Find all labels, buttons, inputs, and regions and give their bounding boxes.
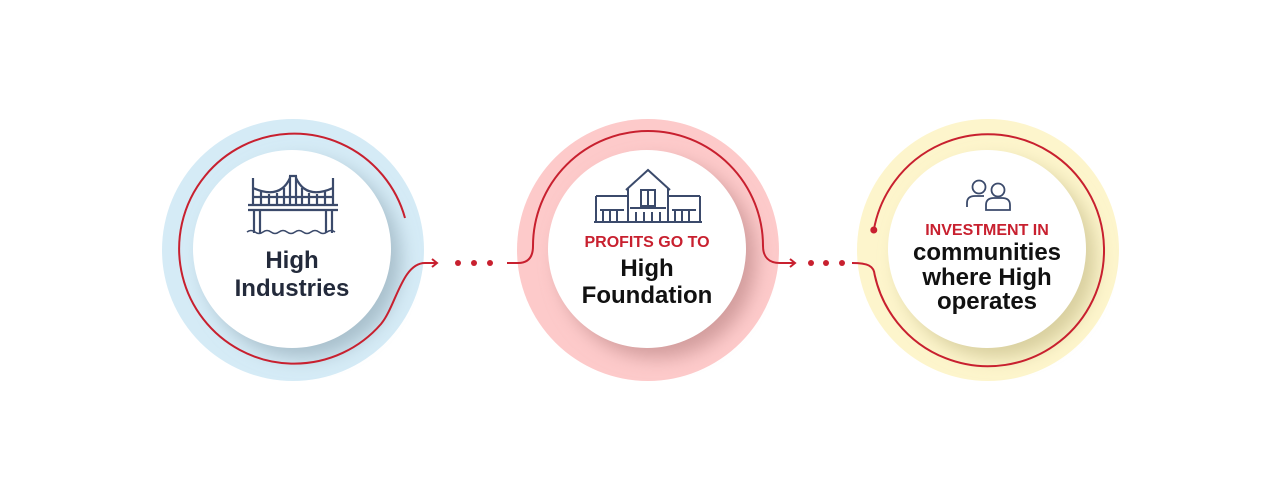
heading: High Industries: High <box>265 247 319 274</box>
panel: High Foundation: High <box>620 255 674 282</box>
panel: High Industries <box>162 119 424 381</box>
panel: Investment in communities: where High <box>921 264 1052 291</box>
dots <box>455 226 877 266</box>
icon: people <box>967 180 1010 210</box>
panel: Investment in communities: communities <box>913 239 1061 266</box>
icon: bridge <box>247 176 338 234</box>
panel: Investment in communities: operates <box>937 288 1037 315</box>
panel: High Foundation <box>517 119 779 381</box>
icon: building <box>594 170 702 222</box>
panel: High Foundation: Foundation <box>582 282 712 309</box>
arrow: flow line <box>179 131 1104 366</box>
panel: High Industries: Industries <box>235 275 349 302</box>
heading: Investment in communities where High operates: INVESTMENT IN <box>925 222 1049 239</box>
panel: Investment in communities <box>857 119 1119 381</box>
heading: Profits go to High Foundation: PROFITS GO TO <box>584 234 710 251</box>
